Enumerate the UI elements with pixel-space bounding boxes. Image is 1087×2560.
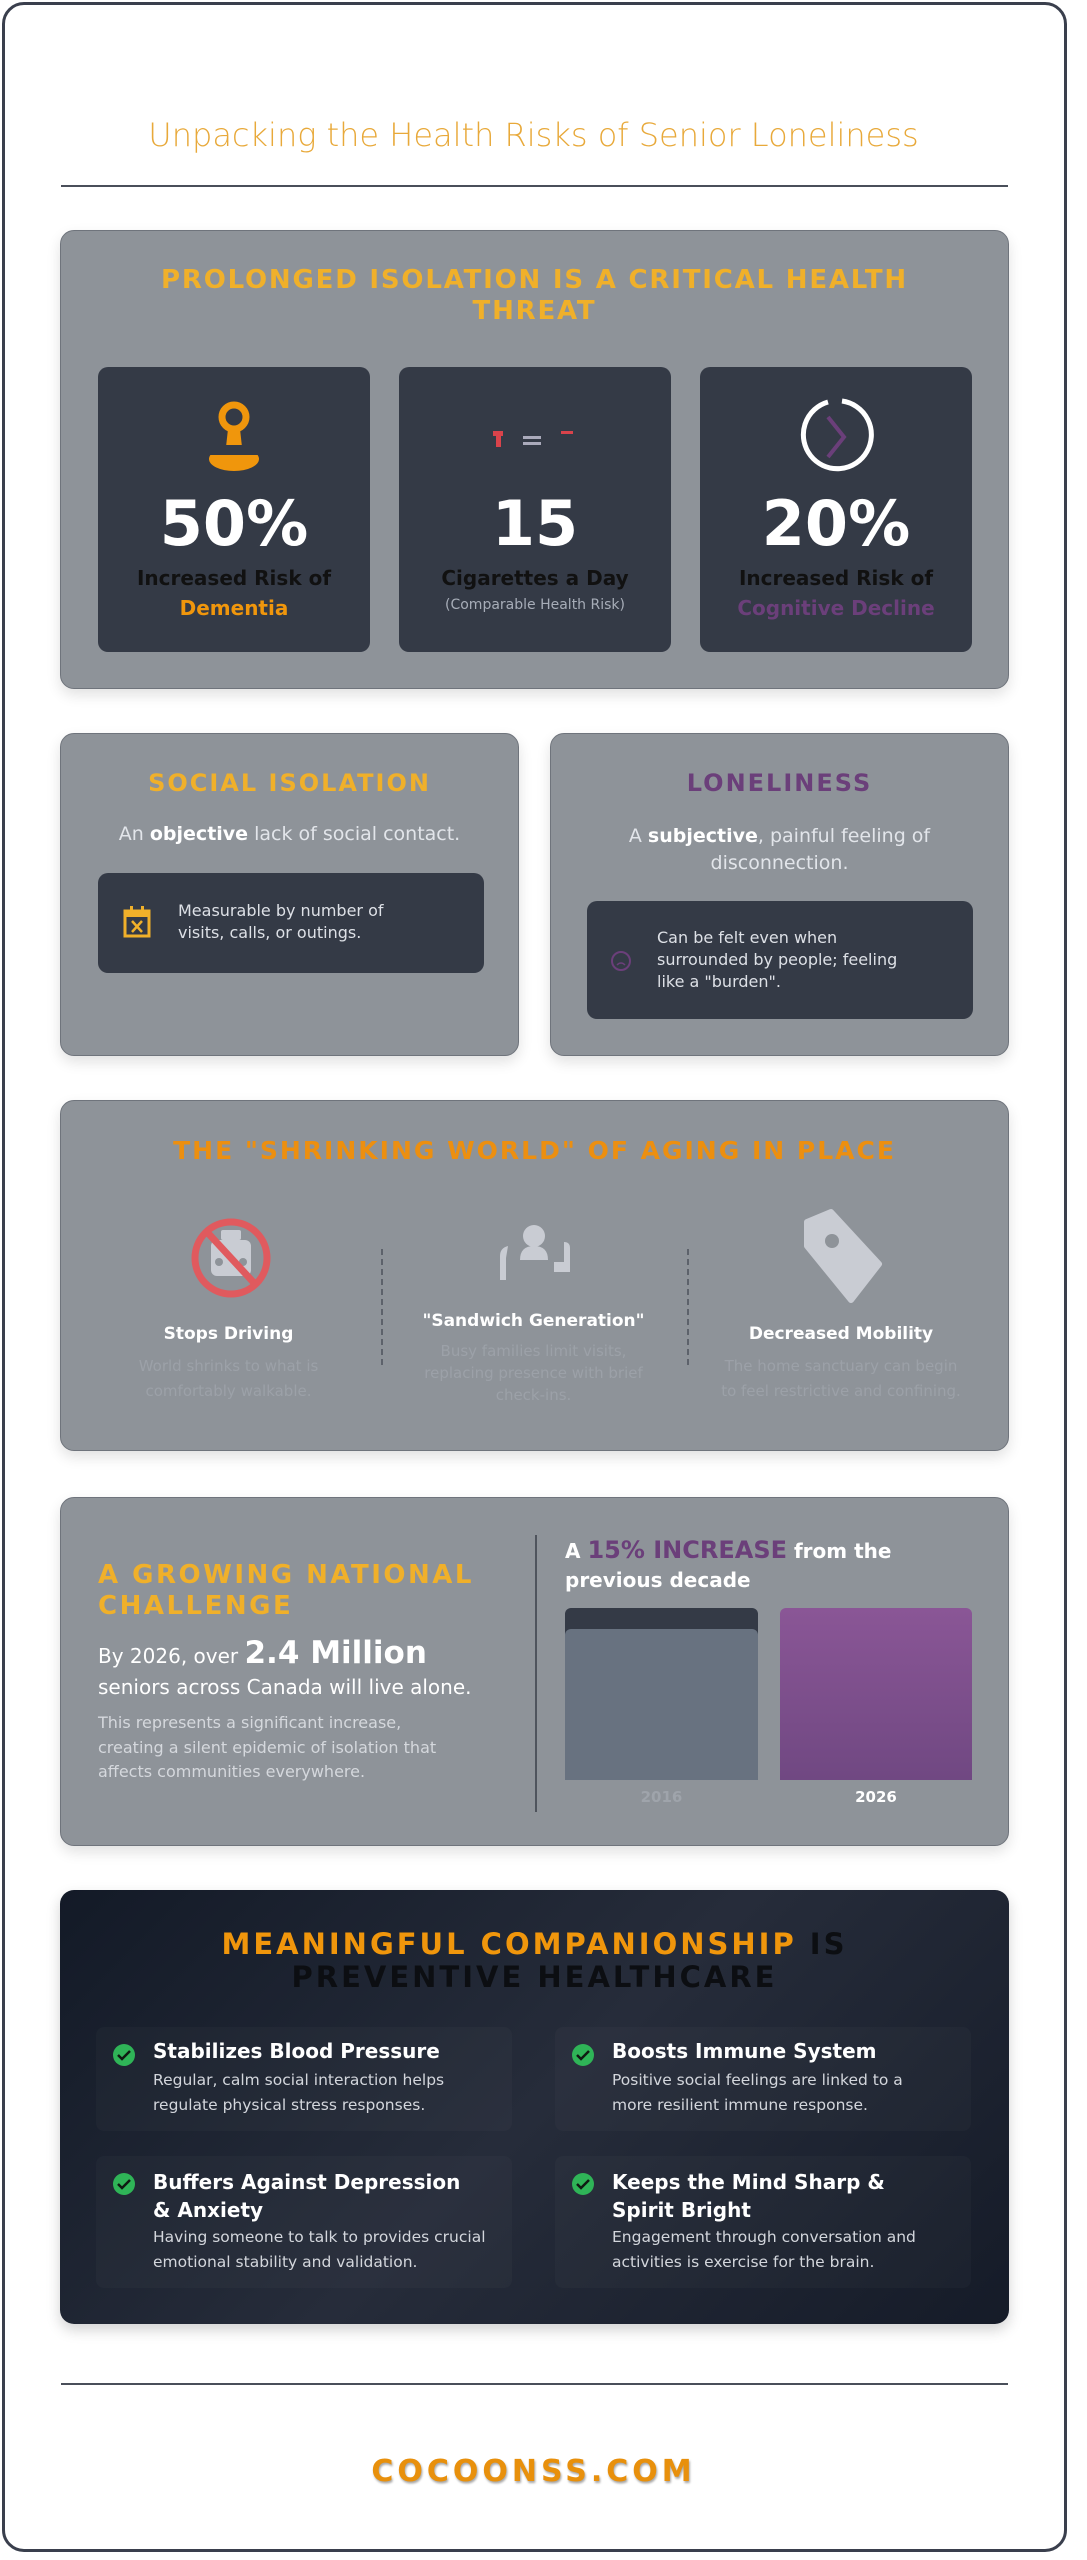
icon: tag	[804, 1209, 882, 1303]
card: cigarettes: (Comparable Health Risk)	[445, 597, 625, 613]
benefit: depression: Buffers Against Depression	[153, 2170, 460, 2194]
benefit: immune: Boosts Immune System	[612, 2039, 876, 2063]
heading: prolonged isolation: THREAT	[473, 296, 596, 326]
footer: brand: COCOONSS.COM	[371, 2454, 696, 2489]
column: stops driving	[139, 1218, 318, 1400]
icon: no driving	[192, 1218, 270, 1298]
label	[737, 566, 935, 620]
icon: circle chevron	[800, 398, 874, 472]
supporting text: This represents a significant increase, creating a silent epidemic of isolation that affects communities everywhere.	[98, 1713, 436, 1781]
icon: sad face	[611, 951, 631, 971]
panel: shrinking world	[60, 1100, 1009, 1451]
description: Busy families limit visits, replacing presence with brief check-ins.	[424, 1342, 643, 1404]
benefit: depression	[96, 2156, 512, 2288]
column: decreased mobility	[721, 1209, 961, 1400]
main stat text	[98, 1635, 472, 1699]
label: Cognitive Decline	[737, 596, 935, 620]
benefit: mind sharp: Spirit Bright	[612, 2198, 751, 2222]
panel: meaningful companionship	[60, 1890, 1009, 2324]
benefit: immune: Positive social feelings are linked to a more resilient immune response.	[612, 2071, 903, 2114]
chart heading: A 15% INCREASE from the previous decade	[565, 1536, 891, 1592]
heading: SOCIAL ISOLATION	[148, 769, 431, 797]
label: Increased Risk of	[137, 566, 331, 590]
icon: people	[500, 1225, 570, 1280]
icon: dementia	[209, 402, 259, 471]
label: Dementia	[180, 596, 288, 620]
benefit: mind sharp: Keeps the Mind Sharp &	[612, 2170, 885, 2194]
description: World shrinks to what is comfortably walkable.	[139, 1357, 318, 1400]
panel: social isolation	[60, 733, 519, 1056]
heading: CHALLENGE	[98, 1591, 293, 1621]
benefit: blood pressure	[96, 2027, 512, 2131]
definition: A subjective, painful feeling of disconnection.	[629, 825, 930, 874]
main stat text: By 2026, over 2.4 Million	[98, 1635, 427, 1671]
stat 15: 15	[492, 487, 578, 560]
heading: PREVENTIVE HEALTHCARE	[292, 1960, 777, 1994]
card: cognitive decline	[700, 367, 972, 652]
title: Stops Driving	[164, 1324, 293, 1344]
heading: prolonged isolation: PROLONGED ISOLATION IS A CRITICAL HEALTH	[161, 265, 908, 295]
main stat text: seniors across Canada will live alone.	[98, 1675, 472, 1699]
bar 2026	[780, 1608, 972, 1780]
bar chart: 2026	[855, 1788, 897, 1806]
title: "Sandwich Generation"	[422, 1311, 645, 1331]
label: Increased Risk of	[739, 566, 933, 590]
card: dementia	[98, 367, 370, 652]
benefit: depression: Having someone to talk to provides crucial emotional stability and validation.	[153, 2228, 486, 2271]
heading	[222, 1927, 847, 1994]
icon: cigarette equals	[493, 431, 573, 447]
heading	[98, 1560, 474, 1621]
text: Can be felt even when surrounded by people; feeling like a "burden".	[657, 928, 897, 991]
axis labels: 2016	[641, 1788, 682, 1806]
benefit: mind sharp: Engagement through conversation and activities is exercise for the brain.	[612, 2228, 916, 2271]
panel: loneliness	[550, 733, 1009, 1056]
heading: THE "SHRINKING WORLD" OF AGING IN PLACE	[173, 1136, 896, 1165]
note box	[98, 873, 484, 973]
bar chart	[565, 1608, 972, 1806]
title: Decreased Mobility	[749, 1324, 933, 1344]
benefit: depression: & Anxiety	[153, 2198, 263, 2222]
column: sandwich generation	[422, 1225, 645, 1404]
benefit: mind sharp	[555, 2156, 971, 2288]
heading: A GROWING NATIONAL	[98, 1560, 474, 1590]
title: Unpacking the Health Risks of Senior Loneliness	[148, 116, 919, 154]
panel: critical health threat	[60, 230, 1009, 689]
text: Measurable by number of visits, calls, or outings.	[178, 901, 384, 942]
benefit: blood pressure: Regular, calm social interaction helps regulate physical stress responses.	[153, 2071, 444, 2114]
stat 50%: 50%	[160, 487, 308, 560]
note box	[587, 901, 973, 1019]
benefit: blood pressure: Stabilizes Blood Pressure	[153, 2039, 440, 2063]
heading: LONELINESS	[687, 769, 872, 797]
bar 2016	[565, 1608, 758, 1780]
benefit: immune	[555, 2027, 971, 2131]
card: cigarettes	[399, 367, 671, 652]
stat 20%: 20%	[762, 487, 910, 560]
label	[137, 566, 332, 620]
heading: prolonged isolation	[161, 265, 908, 326]
panel: growing national challenge	[60, 1497, 1009, 1846]
icon: calendar	[124, 906, 150, 938]
definition: An objective lack of social contact.	[119, 823, 460, 845]
label: Cigarettes a Day	[441, 566, 629, 590]
description: The home sanctuary can begin to feel restrictive and confining.	[721, 1357, 961, 1400]
heading: MEANINGFUL COMPANIONSHIP IS	[222, 1927, 847, 1961]
